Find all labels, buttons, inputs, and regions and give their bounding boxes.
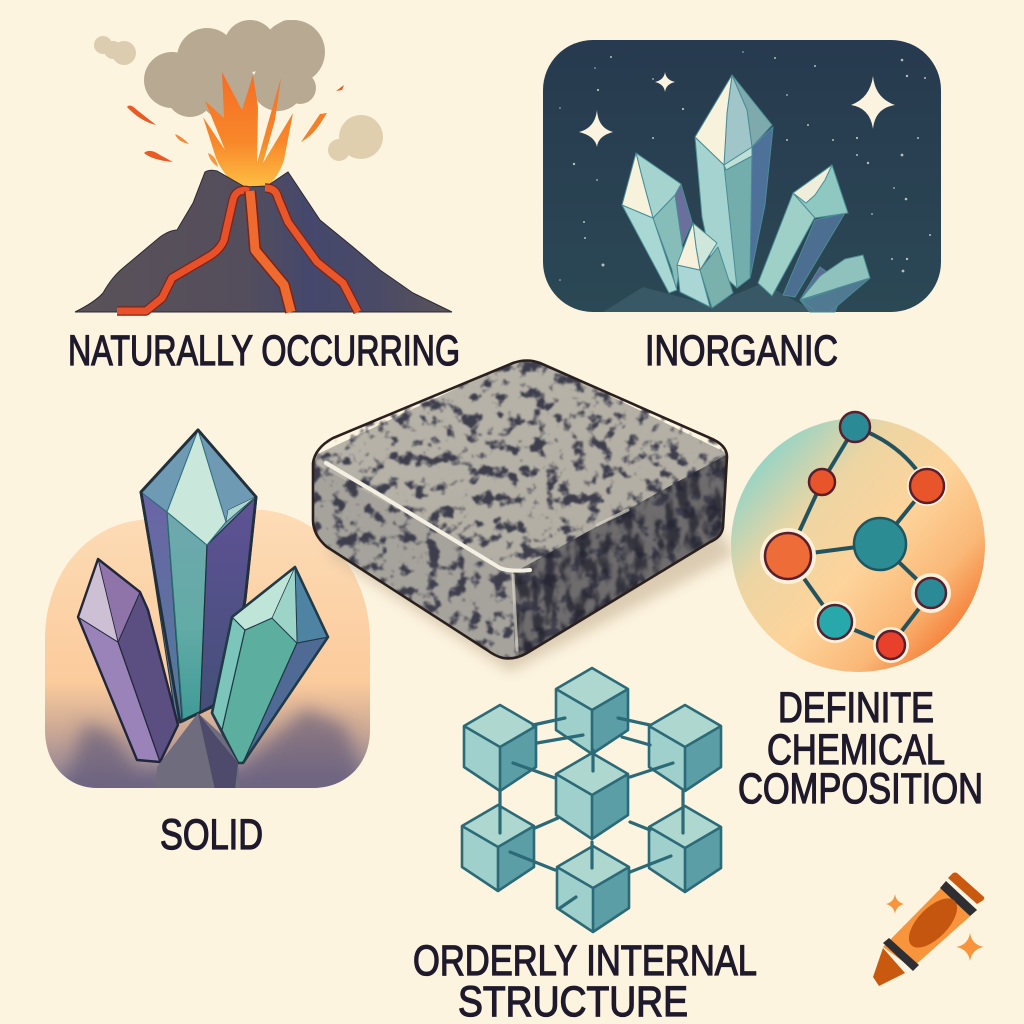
right face	[513, 455, 726, 656]
smoke cloud	[144, 20, 325, 120]
mountain	[75, 170, 452, 312]
icon: molecule	[731, 412, 985, 672]
edge highlight	[326, 463, 530, 571]
crystal: left	[622, 153, 692, 293]
sparkles	[886, 894, 904, 914]
atoms	[765, 412, 946, 659]
crystal: center	[695, 75, 773, 288]
sparkles	[579, 72, 895, 147]
left face	[314, 464, 519, 657]
label: inorganic: INORGANIC	[645, 327, 838, 375]
right face dark streaks	[513, 456, 726, 656]
icon: crystal lattice	[462, 668, 721, 932]
cubes	[556, 668, 628, 754]
ground	[603, 283, 815, 312]
icon: granite rock specimen	[312, 359, 728, 660]
connectors	[500, 718, 683, 908]
night sky	[543, 40, 941, 312]
icon: crayon	[873, 872, 984, 986]
panel: solid	[45, 430, 370, 800]
gradient disc	[731, 418, 985, 672]
small right puff	[328, 115, 383, 161]
top face	[314, 362, 726, 573]
lava flows	[117, 188, 358, 312]
crystal: right teal	[212, 567, 328, 763]
label: definite chemical composition: DEFINITE	[778, 684, 934, 732]
small left puff	[94, 36, 136, 65]
bonds	[788, 427, 931, 645]
label: solid: SOLID	[160, 811, 263, 859]
label: naturally occurring: NATURALLY OCCURRING	[68, 327, 460, 375]
granite speckles	[314, 362, 726, 658]
flames	[203, 72, 293, 188]
crystal: front small	[677, 223, 733, 308]
lava sparks	[127, 85, 344, 167]
crystal: far right	[800, 255, 870, 312]
rock outline	[313, 360, 727, 658]
hazy rock	[50, 708, 360, 800]
rock base	[155, 713, 240, 790]
label: definite chemical composition: CHEMICAL	[767, 726, 945, 774]
rock shadow	[330, 530, 735, 672]
atom halos	[760, 466, 951, 663]
panel: inorganic	[543, 40, 941, 312]
peach rounded background	[45, 510, 370, 788]
star dots	[559, 51, 931, 281]
crystal: tall center	[141, 430, 256, 722]
label: orderly internal structure: ORDERLY INTERNAL	[413, 937, 757, 985]
icon: volcano	[75, 20, 452, 312]
crystal: right	[758, 165, 848, 297]
label: orderly internal structure	[413, 937, 757, 1024]
label: definite chemical composition	[738, 684, 983, 813]
crystal: left purple	[78, 559, 178, 762]
